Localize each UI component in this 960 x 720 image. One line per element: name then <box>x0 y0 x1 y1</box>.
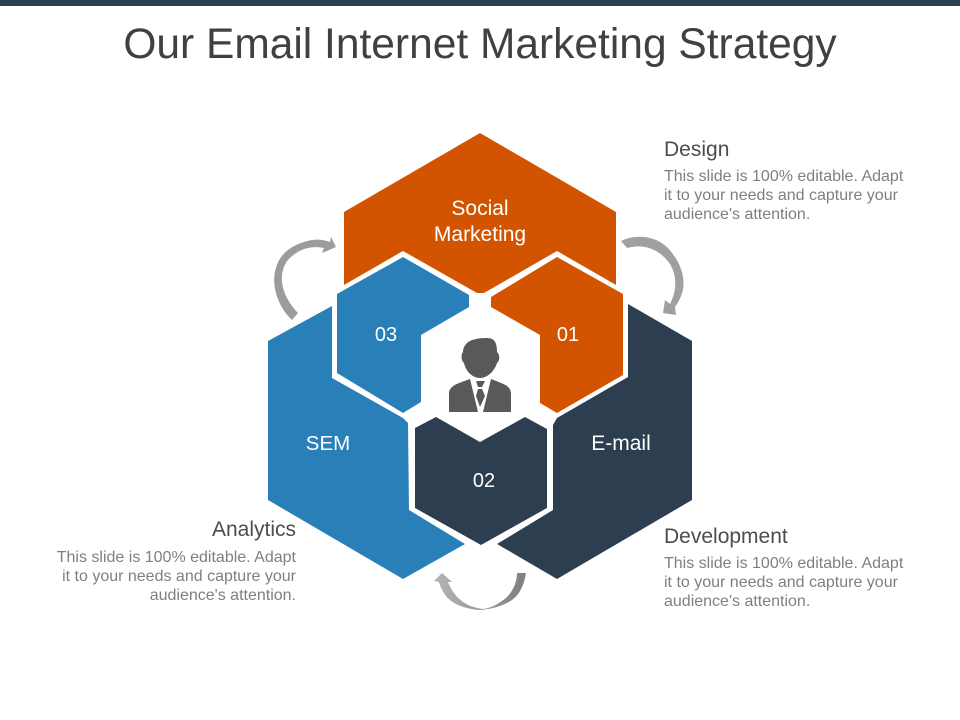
text block: design: it to your needs and capture your <box>664 187 898 204</box>
text block: design: Design <box>664 138 729 161</box>
arrow: top left <box>274 237 336 320</box>
panel: 03 <box>337 257 469 413</box>
text block: analytics <box>57 518 296 604</box>
label: SEM: SEM <box>306 432 350 455</box>
panel: 02 <box>415 417 547 545</box>
text block: design <box>664 138 904 223</box>
text block: development: Development <box>664 525 788 548</box>
text block: analytics: This slide is 100% editable. Adapt <box>57 549 296 566</box>
panel: social marketing <box>344 133 616 293</box>
text block: design: audience's attention. <box>664 206 810 223</box>
text block: development: audience's attention. <box>664 593 810 610</box>
label: social: Social <box>451 197 509 220</box>
arrow: bottom <box>434 573 526 610</box>
label: 03: 03 <box>375 324 397 346</box>
panel: e-mail <box>497 304 692 579</box>
text block: analytics: it to your needs and capture your <box>62 568 296 585</box>
text block: analytics: Analytics <box>212 518 296 541</box>
label: 02: 02 <box>473 470 495 492</box>
text block: development: it to your needs and capture your <box>664 574 898 591</box>
title: Our Email Internet Marketing Strategy <box>123 21 837 68</box>
label: marketing: Marketing <box>434 223 526 246</box>
label: e-mail: E-mail <box>591 432 651 455</box>
text block: analytics: audience's attention. <box>150 587 296 604</box>
panel: 01 <box>491 257 623 413</box>
text block: design: This slide is 100% editable. Adapt <box>664 168 903 185</box>
arrow: top right <box>621 237 684 315</box>
text block: development <box>664 525 904 610</box>
text block: development: This slide is 100% editable. Adapt <box>664 555 903 572</box>
top bar <box>0 0 960 6</box>
panel: SEM <box>268 306 465 579</box>
label: 01: 01 <box>557 324 579 346</box>
icon: businessman <box>449 338 511 412</box>
